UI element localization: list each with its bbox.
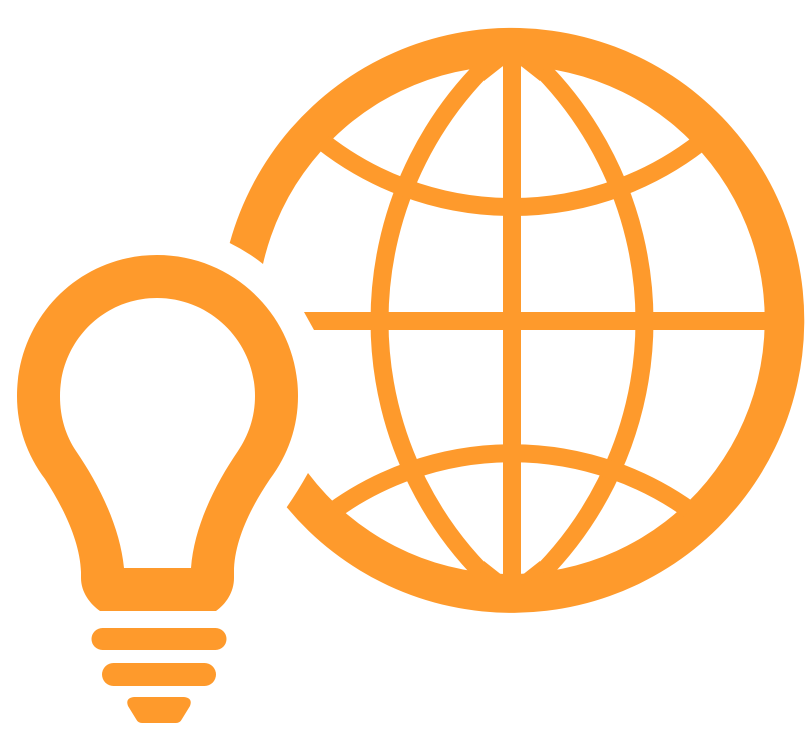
globe outer ring: [230, 28, 804, 613]
globe meridian tips: [480, 55, 544, 587]
bulb base tip: [127, 697, 191, 723]
icon: light bulb: [17, 255, 298, 723]
globe grid lines: [320, 66, 702, 574]
icon: globe: [230, 28, 804, 613]
bulb base thread 2: [102, 663, 216, 686]
globe equator: [304, 312, 770, 330]
bulb base thread 1: [92, 628, 226, 650]
bulb glass: [17, 255, 298, 611]
